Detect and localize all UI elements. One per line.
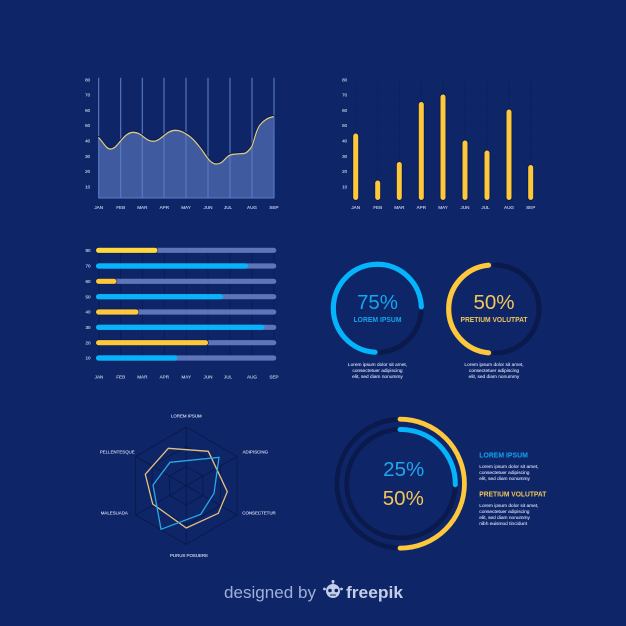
donut heading: PRETIUM VOLUTPAT (460, 317, 528, 324)
column chart y axis labels: 30 (342, 154, 348, 159)
footer credit (224, 580, 404, 602)
donut caption: consectetuer adipiscing (469, 368, 519, 374)
column chart month labels: AUG (504, 205, 514, 210)
column guide lines (356, 79, 531, 200)
donut track (495, 265, 539, 353)
legend: pretium volutpat: consectetuer adipiscing (479, 509, 530, 515)
column chart month labels: APR (417, 205, 427, 210)
bar chart month labels: AUG (247, 374, 257, 380)
column chart month labels: MAR (394, 205, 405, 210)
legend: lorem ipsum: elit, sed diam nonummy (479, 476, 531, 482)
column chart y axis labels: 70 (342, 92, 348, 98)
area chart y axis labels: 30 (85, 154, 91, 159)
donut caption (348, 362, 407, 380)
area chart month labels: APR (160, 205, 170, 210)
bar chart y axis labels: 80 (85, 248, 91, 253)
legend: lorem ipsum (479, 451, 538, 482)
donut percent: 50% (473, 291, 515, 314)
area chart y axis labels: 80 (85, 78, 91, 82)
column bars outline (356, 97, 531, 198)
radar labels (100, 414, 276, 558)
grid lines (98, 78, 274, 198)
column chart y axis labels: 60 (342, 108, 348, 113)
inner track (347, 429, 455, 538)
icon: freepik mascot (323, 580, 343, 598)
radar grid (136, 427, 237, 544)
area chart (85, 78, 279, 210)
area chart y axis labels: 40 (85, 138, 91, 144)
radar labels: CONSECTETUR (242, 511, 276, 516)
bar chart month labels (95, 374, 279, 380)
bar chart month labels: SEP (269, 374, 279, 380)
column chart y axis labels: 20 (342, 169, 348, 174)
donut caption: Lorem ipsum dolor sit amet, (348, 362, 407, 368)
column chart month labels (351, 205, 535, 210)
area fill (99, 117, 274, 198)
bar chart y axis labels: 20 (85, 340, 91, 345)
bar chart y axis labels: 40 (85, 310, 91, 315)
area chart month labels: SEP (269, 205, 279, 210)
bar chart month labels: JUN (204, 374, 212, 380)
bar chart y axis labels: 10 (85, 356, 91, 361)
donut caption: Lorem ipsum dolor sit amet, (464, 362, 524, 368)
area chart month labels: JUL (224, 205, 233, 210)
donut value arc (333, 264, 421, 352)
donut caption: elit, sed diam nonummy (469, 374, 520, 380)
area chart month labels: AUG (247, 205, 257, 210)
column chart y axis labels (342, 78, 348, 190)
outer arc: yellow (400, 419, 464, 548)
legend: lorem ipsum: LOREM IPSUM (479, 451, 528, 460)
bar chart month labels: JUL (224, 374, 233, 380)
bar chart month labels: JAN (95, 374, 103, 380)
area chart y axis labels: 20 (85, 169, 91, 174)
area chart month labels: FEB (116, 205, 125, 210)
area chart month labels: JUN (204, 205, 212, 210)
column chart month labels: JUL (481, 205, 490, 210)
bar chart month labels: FEB (116, 374, 125, 380)
area chart y axis labels: 60 (85, 108, 91, 113)
legend: pretium volutpat (479, 490, 547, 527)
large double donut (337, 419, 464, 548)
radar labels: MALESUADA (101, 511, 128, 516)
column chart y axis labels: 80 (342, 78, 348, 82)
column chart y axis labels: 40 (342, 138, 348, 144)
bar chart guide lines (99, 250, 274, 362)
bar chart y axis labels: 70 (85, 264, 91, 269)
column chart month labels: JAN (351, 205, 360, 210)
donut: 75% lorem ipsum (333, 264, 421, 380)
area chart month labels: MAR (137, 205, 148, 210)
donut: 50% pretium volutpat (449, 265, 539, 380)
radar labels: PURUS POSUERE (170, 553, 208, 558)
radar series: blue (153, 457, 219, 529)
area curve line (99, 116, 273, 164)
bar chart month labels: MAY (181, 374, 191, 380)
radar labels: LOREM IPSUM (171, 414, 202, 419)
bar chart y axis labels: 60 (85, 279, 91, 284)
column chart month labels: FEB (373, 205, 382, 210)
radar series: yellow (145, 448, 227, 528)
area chart month labels: MAY (181, 205, 191, 210)
column chart (342, 78, 535, 210)
percent 25: 25% (383, 458, 424, 481)
column chart month labels: JUN (461, 205, 469, 210)
area chart y axis labels: 50 (85, 123, 91, 128)
donut heading: LOREM IPSUM (354, 317, 402, 324)
column chart y axis labels: 10 (342, 184, 348, 190)
donut value arc (449, 265, 488, 353)
radar labels: ADIPISCING (243, 449, 269, 454)
column chart month labels: SEP (526, 205, 535, 210)
legend: lorem ipsum: consectetuer adipiscing (479, 470, 530, 476)
bar chart y axis labels: 30 (85, 325, 91, 330)
radar chart (100, 414, 276, 558)
area chart y axis labels: 10 (85, 184, 91, 190)
bar chart month labels: MAR (137, 374, 148, 380)
legend: pretium volutpat: PRETIUM VOLUTPAT (479, 490, 547, 499)
donut percent: 75% (357, 291, 398, 314)
column chart y axis labels: 50 (342, 123, 348, 128)
donut caption (464, 362, 524, 380)
yellow bar shadows (99, 250, 206, 343)
freepik wordmark: freepik (346, 583, 404, 602)
area chart month labels: JAN (94, 205, 103, 210)
area chart y axis labels: 70 (85, 92, 91, 98)
bar chart y axis labels (85, 248, 91, 361)
designed by text: designed by (224, 584, 317, 602)
legend: pretium volutpat: nibh euismod tincidunt (479, 521, 528, 527)
column chart month labels: MAY (438, 205, 448, 210)
horizontal bar chart (85, 248, 279, 380)
yellow bars (99, 250, 206, 343)
area chart y axis labels (85, 78, 91, 190)
percent 50: 50% (383, 487, 424, 510)
bar chart y axis labels: 50 (85, 294, 91, 299)
donut caption: elit, sed diam nonummy (352, 374, 403, 380)
outer track (337, 419, 397, 548)
bar chart month labels: APR (160, 374, 170, 380)
donut caption: consectetuer adipiscing (352, 368, 403, 374)
column bars (356, 97, 531, 198)
radar labels: PELLENTESQUE (100, 449, 135, 454)
inner arc: blue (400, 429, 455, 485)
area chart month labels (94, 205, 279, 210)
legend: lorem ipsum: Lorem ipsum dolor sit amet, (479, 464, 538, 470)
bar tracks (99, 250, 274, 358)
blue bars (99, 266, 262, 358)
donut track (379, 312, 421, 352)
legend: pretium volutpat: Lorem ipsum dolor sit amet, (479, 503, 538, 509)
legend: pretium volutpat: elit, sed diam nonummy (479, 515, 531, 521)
